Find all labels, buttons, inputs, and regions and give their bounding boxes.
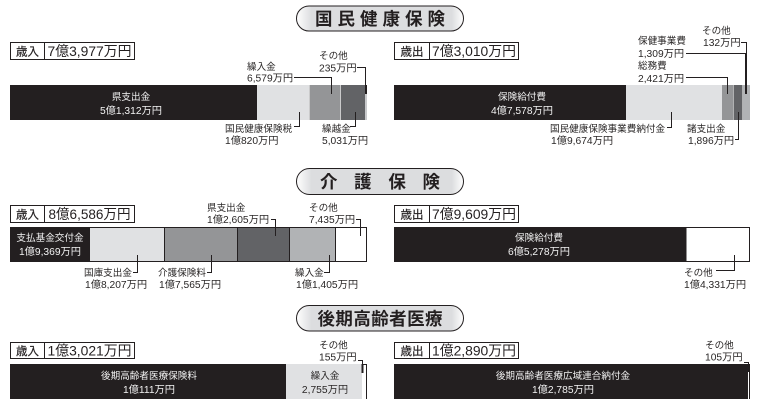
expenditure label (684, 255, 746, 291)
expenditure label: その他 (705, 340, 734, 352)
expenditure stacked bar (394, 364, 750, 399)
revenue labels: 1億8,207万円 (85, 278, 147, 291)
revenue stacked bar: 1億9,369万円 (19, 245, 81, 258)
revenue labels: 繰入金 (247, 61, 276, 73)
expenditure labels: 1億9,674万円 (551, 134, 613, 147)
revenue label: その他 (319, 340, 348, 352)
expenditure total box: 1億2,890万円 (432, 342, 516, 358)
revenue labels: その他 (319, 50, 348, 62)
expenditure total box: 歳出 (400, 343, 424, 359)
expenditure total box (394, 342, 518, 359)
expenditure labels: 国民健康保険事業費納付金 (550, 123, 666, 135)
expenditure stacked bar (394, 227, 750, 262)
revenue stacked bar: 2,755万円 (302, 385, 348, 396)
revenue labels: 繰入金 (295, 267, 324, 279)
expenditure total box: 7億3,010万円 (432, 43, 516, 59)
revenue labels: 7,435万円 (309, 215, 355, 226)
expenditure labels: 総務費 (638, 60, 667, 72)
revenue stacked bar: 県支出金 (112, 91, 151, 103)
expenditure labels: 132万円 (703, 38, 741, 49)
revenue labels: 6,579万円 (247, 74, 293, 84)
revenue total box (10, 342, 134, 359)
heading pill: 介護保険 (296, 168, 464, 194)
expenditure stacked bar: 6億5,278万円 (508, 245, 570, 258)
section: 後期高齢者医療 (10, 306, 750, 399)
expenditure labels: 諸支出金 (687, 123, 726, 135)
revenue total box: 歳入 (16, 44, 39, 60)
revenue labels: 235万円 (319, 64, 357, 74)
expenditure stacked bar: 保険給付費 (498, 91, 546, 103)
revenue labels: 1億1,405万円 (296, 278, 358, 291)
section: 介護保険 (10, 168, 750, 291)
revenue total box: 7億3,977万円 (48, 43, 132, 59)
revenue label: 155万円 (319, 352, 357, 364)
heading pill: 後期高齢者医療: 後期高齢者医療 (318, 306, 443, 331)
revenue total box: 歳入 (16, 206, 39, 222)
expenditure label: 1億4,331万円 (684, 278, 746, 291)
revenue total box (10, 206, 134, 222)
expenditure label (705, 340, 748, 372)
revenue total box (10, 42, 134, 60)
expenditure labels: 保健事業費 (638, 35, 686, 47)
expenditure total box: 歳出 (400, 206, 424, 222)
revenue labels: その他 (309, 202, 338, 214)
expenditure stacked bar: 保険給付費 (515, 232, 563, 244)
heading pill: 介護保険: 介護保険 (320, 169, 440, 194)
expenditure total box: 7億9,609万円 (432, 206, 516, 222)
expenditure total box (394, 206, 518, 222)
expenditure labels: 2,421万円 (638, 74, 684, 85)
revenue stacked bar: 1億111万円 (123, 383, 175, 396)
expenditure labels: その他 (702, 25, 731, 37)
expenditure stacked bar: 1億2,785万円 (532, 383, 594, 396)
expenditure label: その他 (684, 267, 713, 279)
revenue labels (84, 202, 360, 291)
revenue labels: 1億820万円 (225, 134, 279, 147)
revenue stacked bar (10, 85, 367, 120)
revenue labels: 介護保険料 (158, 267, 206, 279)
revenue total box: 歳入 (16, 343, 39, 359)
expenditure label: 105万円 (705, 352, 743, 364)
revenue labels: 繰越金 (322, 123, 351, 135)
revenue labels: 国民健康保険税 (225, 123, 293, 135)
revenue labels: 県支出金 (207, 202, 246, 214)
revenue stacked bar: 5億1,312万円 (100, 104, 162, 117)
revenue stacked bar: 支払基金交付金 (16, 232, 84, 244)
revenue stacked bar (10, 364, 366, 399)
revenue stacked bar: 後期高齢者医療保険料 (101, 370, 197, 382)
revenue labels: 1億2,605万円 (207, 213, 269, 226)
expenditure labels: 1,309万円 (638, 49, 684, 60)
section: 国民健康保険 (10, 6, 750, 147)
revenue label (319, 340, 362, 366)
revenue labels: 国庫支出金 (84, 267, 132, 279)
expenditure labels: 1,896万円 (688, 136, 734, 147)
heading pill: 国民健康保険: 国民健康保険 (315, 6, 446, 31)
revenue total box: 1億3,021万円 (48, 342, 132, 358)
expenditure total box: 歳出 (400, 44, 424, 60)
expenditure stacked bar: 4億7,578万円 (491, 104, 553, 117)
expenditure labels (550, 25, 746, 147)
revenue labels (225, 50, 368, 147)
revenue labels: 5,031万円 (322, 136, 368, 147)
revenue labels: 1億7,565万円 (159, 278, 221, 291)
revenue total box: 8億6,586万円 (48, 206, 130, 222)
revenue stacked bar (10, 227, 366, 262)
revenue stacked bar: 繰入金 (311, 370, 340, 382)
expenditure stacked bar (394, 85, 750, 120)
expenditure total box (394, 42, 518, 60)
expenditure stacked bar: 後期高齢者医療広域連合納付金 (496, 370, 631, 382)
